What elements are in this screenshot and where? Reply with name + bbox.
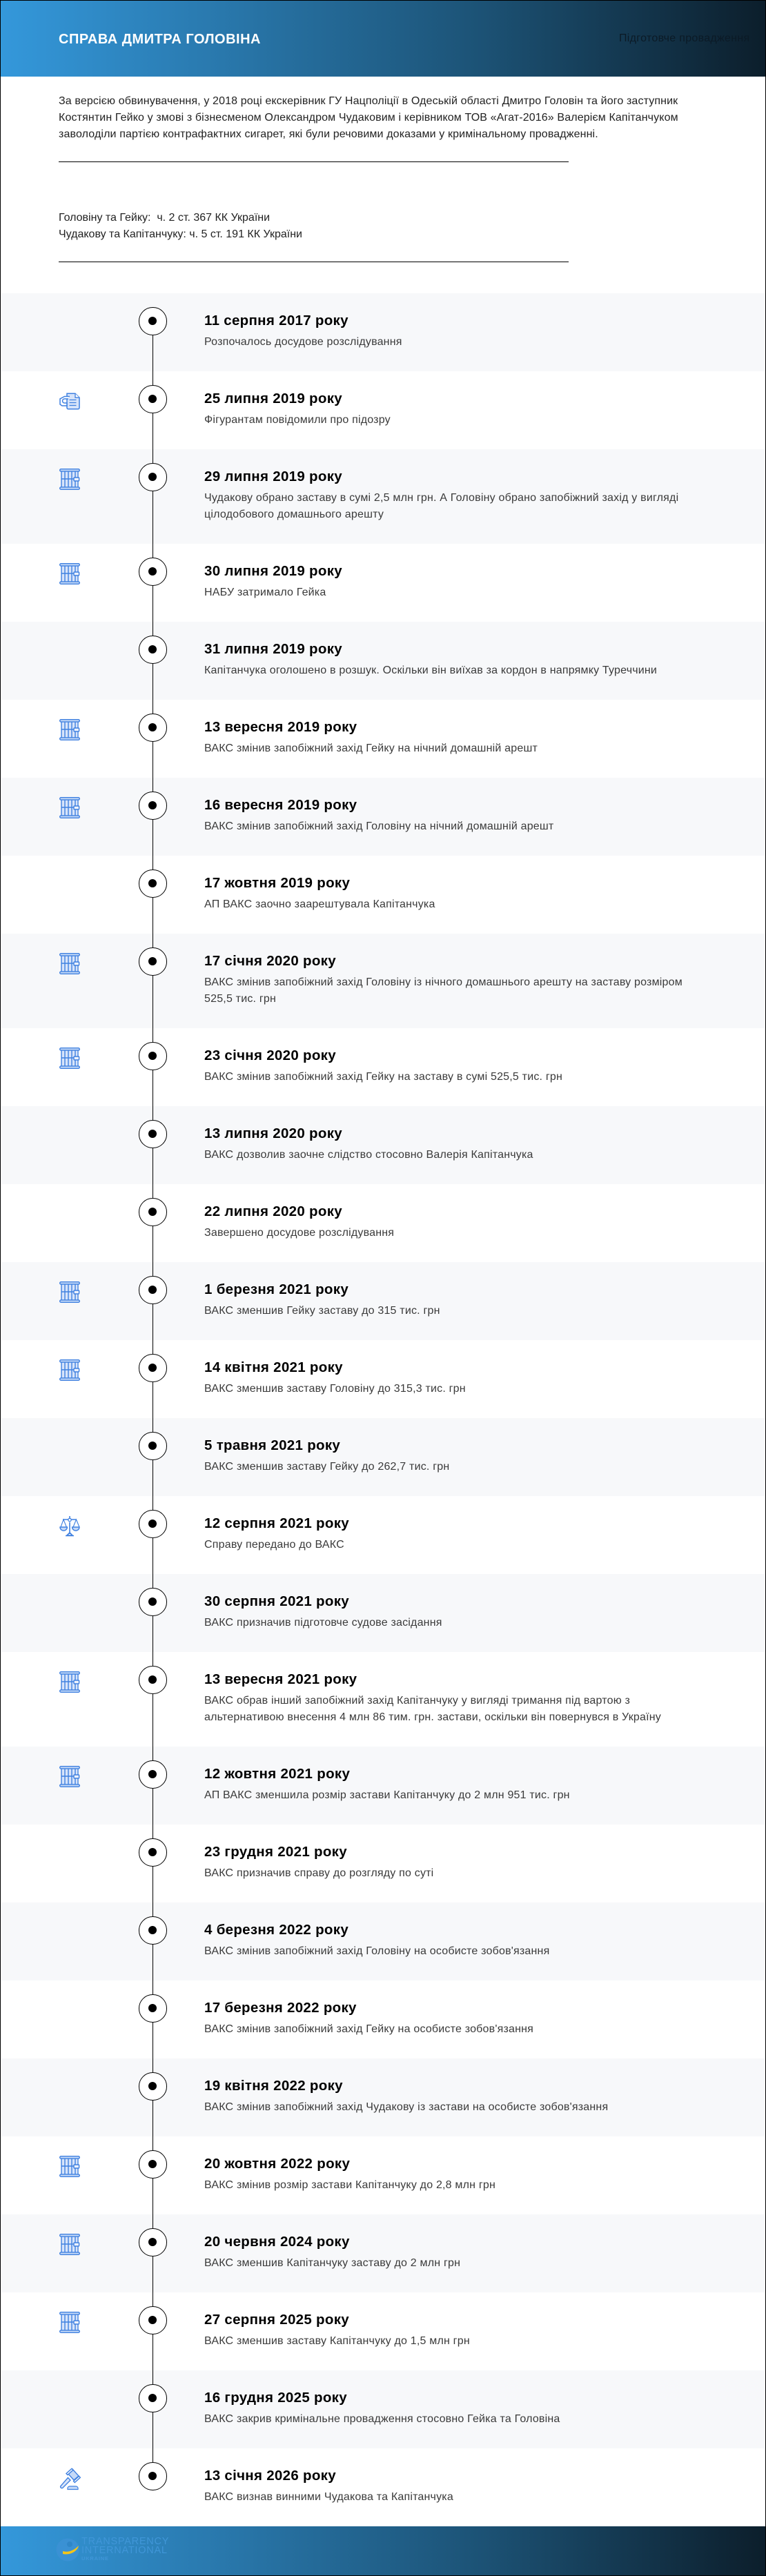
- date: 16 грудня 2025 року: [204, 2390, 347, 2406]
- marker: [139, 463, 167, 491]
- description: ВАКС змінив запобіжний захід Гейку на заставу в сумі 525,5 тис. грн: [204, 1071, 562, 1083]
- header band: [0, 0, 766, 77]
- marker: [139, 558, 167, 586]
- icon: cage: [59, 2312, 80, 2333]
- description: Завершено досудове розслідування: [204, 1227, 394, 1239]
- description: ВАКС змінив розмір застави Капітанчуку до 2,8 млн грн: [204, 2179, 495, 2191]
- icon: cage: [59, 1281, 80, 1303]
- row: 1 березня 2021: [0, 1262, 766, 1340]
- description: цілодобового домашнього арешту: [204, 509, 384, 520]
- marker: [139, 1666, 167, 1694]
- date: 5 травня 2021 року: [204, 1437, 340, 1453]
- row: 29 липня 2019: [0, 449, 766, 544]
- row: 17 січня 2020: [0, 934, 766, 1028]
- description: Розпочалось досудове розслідування: [204, 336, 402, 348]
- row: 30 липня 2019: [59, 558, 342, 598]
- icon: gavel: [59, 2468, 81, 2490]
- icon: cage: [59, 1766, 80, 1787]
- row: 5 травня 2021: [0, 1418, 766, 1496]
- marker: [139, 1510, 167, 1538]
- description: ВАКС змінив запобіжний захід Чудакову із застави на особисте зобов'язання: [204, 2101, 608, 2113]
- row: 13 липня 2020: [0, 1106, 766, 1184]
- icon: cage: [59, 2156, 80, 2177]
- row: 22 липня 2020: [139, 1198, 394, 1239]
- row: 23 січня 2020: [59, 1042, 562, 1083]
- row: 17 березня 2022: [139, 1994, 533, 2035]
- section label: Підготовче провадження: [619, 32, 749, 44]
- date: 13 вересня 2021 року: [204, 1671, 357, 1687]
- date: 13 липня 2020 року: [204, 1125, 342, 1141]
- date: 11 серпня 2017 року: [204, 313, 348, 328]
- date: 31 липня 2019 року: [204, 641, 342, 657]
- description: альтернативою внесення 4 млн 86 тим. грн. застави, оскільки він повернувся в Україну: [204, 1711, 661, 1723]
- marker: [139, 947, 167, 976]
- icon: cage: [59, 797, 80, 818]
- icon: document and hand: [59, 393, 80, 410]
- date: 13 січня 2026 року: [204, 2468, 336, 2484]
- description: АП ВАКС заочно заарештувала Капітанчука: [204, 898, 435, 910]
- description: ВАКС зменшив заставу Гейку до 262,7 тис. грн: [204, 1461, 449, 1473]
- description: Справу передано до ВАКС: [204, 1539, 344, 1551]
- date: 20 червня 2024 року: [204, 2234, 350, 2250]
- row: 12 серпня 2021: [59, 1510, 349, 1551]
- logo wordmark: INTERNATIONAL: [81, 2545, 168, 2556]
- footer band: [0, 2526, 766, 2576]
- date: 17 жовтня 2019 року: [204, 875, 350, 891]
- date: 30 липня 2019 року: [204, 563, 342, 579]
- icon: cage: [59, 1671, 80, 1693]
- marker: [139, 2072, 167, 2101]
- row: 16 вересня 2019: [0, 778, 766, 856]
- marker: [139, 2462, 167, 2490]
- row: 16 грудня 2025: [0, 2370, 766, 2448]
- row: 11 серпня 2017: [0, 293, 766, 371]
- logo wordmark: TRANSPARENCY: [81, 2536, 169, 2547]
- row: 12 жовтня 2021: [0, 1747, 766, 1825]
- row: 23 грудня 2021: [139, 1838, 433, 1879]
- description: ВАКС змінив запобіжний захід Гейку на нічний домашній арешт: [204, 743, 538, 754]
- timeline axis: [152, 321, 153, 2476]
- row: 13 вересня 2021: [59, 1666, 661, 1723]
- description: [204, 492, 678, 520]
- date: 30 серпня 2021 року: [204, 1593, 349, 1609]
- marker: [139, 1432, 167, 1460]
- description: Чудакову обрано заставу в сумі 2,5 млн грн. А Головіну обрано запобіжний захід у вигляді: [204, 492, 678, 504]
- row: 31 липня 2019: [0, 622, 766, 700]
- date: 17 березня 2022 року: [204, 2000, 357, 2016]
- description: ВАКС призначив справу до розгляду по суті: [204, 1867, 433, 1879]
- marker: [139, 2306, 167, 2334]
- date: 17 січня 2020 року: [204, 953, 336, 969]
- title: СПРАВА ДМИТРА ГОЛОВІНА: [59, 32, 261, 47]
- marker: [139, 1916, 167, 1945]
- description: [204, 1695, 661, 1723]
- description: ВАКС змінив запобіжний захід Головіну на особисте зобов'язання: [204, 1945, 549, 1957]
- intro paragraph: [59, 95, 678, 140]
- date: 20 жовтня 2022 року: [204, 2156, 350, 2172]
- description: ВАКС змінив запобіжний захід Гейку на особисте зобов'язання: [204, 2023, 533, 2035]
- date: 16 вересня 2019 року: [204, 797, 357, 813]
- marker: [139, 1838, 167, 1867]
- description: ВАКС зменшив заставу Капітанчуку до 1,5 млн грн: [204, 2335, 470, 2347]
- description: Капітанчука оголошено в розшук. Оскільки він виїхав за кордон в напрямку Туреччини: [204, 665, 657, 676]
- icon: cage: [59, 563, 80, 584]
- date: 23 січня 2020 року: [204, 1048, 336, 1063]
- marker: [139, 307, 167, 335]
- row: 25 липня 2019: [59, 385, 391, 426]
- logo wordmark: [81, 2536, 169, 2562]
- icon: cage: [59, 719, 80, 740]
- description: ВАКС змінив запобіжний захід Головіну із нічного домашнього арешту на заставу розміром: [204, 976, 682, 988]
- date: 29 липня 2019 року: [204, 469, 342, 484]
- date: 27 серпня 2025 року: [204, 2312, 349, 2328]
- marker: [139, 2228, 167, 2257]
- charges text: Чудакову та Капітанчуку: ч. 5 ст. 191 КК України: [59, 228, 302, 240]
- date: 14 квітня 2021 року: [204, 1359, 343, 1375]
- row: 17 жовтня 2019: [139, 869, 435, 910]
- intro paragraph: заволоділи партією контрафактних сигарет, які були речовими доказами у кримінальному провадженні.: [59, 128, 598, 140]
- description: [204, 976, 682, 1005]
- marker: [139, 2150, 167, 2179]
- marker: [139, 1994, 167, 2023]
- icon: cage: [59, 1048, 80, 1069]
- row: 20 жовтня 2022: [59, 2150, 495, 2191]
- description: ВАКС закрив кримінальне провадження стосовно Гейка та Головіна: [204, 2413, 560, 2425]
- marker: [139, 1042, 167, 1070]
- description: НАБУ затримало Гейка: [204, 587, 326, 598]
- date: 22 липня 2020 року: [204, 1203, 342, 1219]
- description: ВАКС призначив підготовче судове засідання: [204, 1617, 442, 1629]
- description: ВАКС визнав винними Чудакова та Капітанчука: [204, 2491, 453, 2503]
- description: ВАКС змінив запобіжний захід Головіну на нічний домашній арешт: [204, 820, 553, 832]
- date: 13 вересня 2019 року: [204, 719, 357, 735]
- marker: [139, 714, 167, 742]
- description: ВАКС зменшив Гейку заставу до 315 тис. грн: [204, 1305, 440, 1317]
- marker: [139, 385, 167, 413]
- description: ВАКС дозволив заочне слідство стосовно Валерія Капітанчука: [204, 1149, 533, 1161]
- marker: [139, 1120, 167, 1148]
- row: 13 січня 2026: [59, 2462, 453, 2503]
- date: 23 грудня 2021 року: [204, 1844, 347, 1860]
- marker: [139, 1354, 167, 1382]
- date: 25 липня 2019 року: [204, 391, 342, 406]
- marker: [139, 1760, 167, 1789]
- logo: Transparency International Ukraine: [57, 2536, 169, 2562]
- date: 12 серпня 2021 року: [204, 1515, 349, 1531]
- icon: cage: [59, 953, 80, 974]
- intro paragraph: Костянтин Гейко у змові з бізнесменом Олександром Чудаковим і керівником ТОВ «Агат-2016» Валерієм Капітанчуком: [59, 112, 678, 124]
- row: 13 вересня 2019: [59, 714, 538, 754]
- row: 4 березня 2022: [0, 1902, 766, 1980]
- logo wordmark: UKRAINE: [81, 2555, 109, 2562]
- marker: [139, 1198, 167, 1226]
- description: ВАКС зменшив заставу Головіну до 315,3 тис. грн: [204, 1383, 466, 1395]
- description: ВАКС обрав інший запобіжний захід Капітанчуку у вигляді тримання під вартою з: [204, 1695, 630, 1707]
- marker: [139, 1588, 167, 1616]
- row: 14 квітня 2021: [59, 1354, 466, 1395]
- date: 12 жовтня 2021 року: [204, 1766, 350, 1782]
- icon: cage: [59, 469, 80, 490]
- row: 19 квітня 2022: [0, 2058, 766, 2136]
- icon: cage: [59, 1359, 80, 1381]
- description: 525,5 тис. грн: [204, 993, 276, 1005]
- charges text: Головіну та Гейку: ч. 2 ст. 367 КК України: [59, 212, 270, 224]
- marker: [139, 636, 167, 664]
- icon: scales: [59, 1516, 80, 1536]
- intro paragraph: За версією обвинувачення, у 2018 році екскерівник ГУ Нацполіції в Одеській області Дмитро Головін та його заступник: [59, 95, 678, 107]
- description: ВАКС зменшив Капітанчуку заставу до 2 млн грн: [204, 2257, 460, 2269]
- row: 20 червня 2024: [0, 2214, 766, 2292]
- description: АП ВАКС зменшила розмір застави Капітанчуку до 2 млн 951 тис. грн: [204, 1789, 570, 1801]
- marker: [139, 869, 167, 898]
- marker: [139, 792, 167, 820]
- marker: [139, 1276, 167, 1304]
- row: 30 серпня 2021: [0, 1574, 766, 1652]
- charges text: [59, 212, 302, 240]
- logo globe: [57, 2539, 79, 2562]
- icon: cage: [59, 2234, 80, 2255]
- description: Фігурантам повідомили про підозру: [204, 414, 391, 426]
- row: 27 серпня 2025: [59, 2306, 470, 2347]
- date: 4 березня 2022 року: [204, 1922, 348, 1938]
- date: 19 квітня 2022 року: [204, 2078, 343, 2094]
- marker: [139, 2384, 167, 2412]
- date: 1 березня 2021 року: [204, 1281, 348, 1297]
